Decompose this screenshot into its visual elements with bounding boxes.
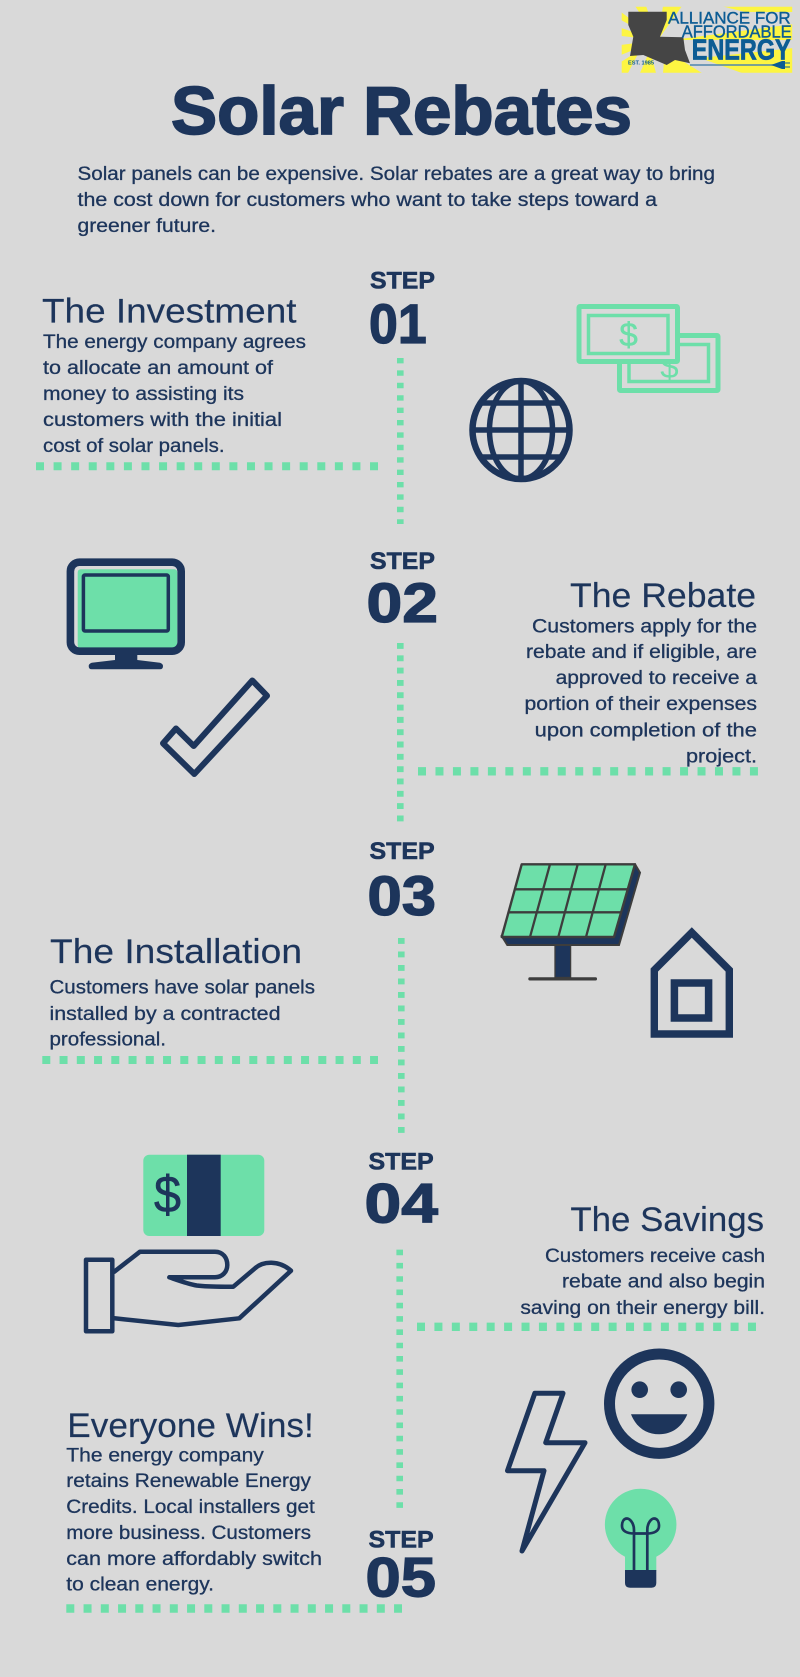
logo: Alliance for Affordable Energy: ALLIANCE FOR: [668, 8, 791, 27]
intro text: [78, 164, 715, 237]
icon: open hand: [86, 1252, 291, 1331]
step 2 body text: Customers apply for the: [532, 616, 757, 638]
step 2 body text: [524, 616, 757, 768]
step 5 body text: The energy company: [66, 1445, 264, 1466]
step 5 body text: [66, 1445, 322, 1596]
step 3 body text: installed by a contracted: [50, 1004, 280, 1025]
icon: monitor: [70, 562, 181, 669]
step 5 body text: retains Renewable Energy: [66, 1471, 312, 1492]
icon: cash note: [143, 1155, 264, 1236]
step 5 body text: to clean energy.: [66, 1575, 214, 1596]
dotted connector vertical: [397, 358, 404, 524]
panel: step 5 everyone wins: [66, 1354, 709, 1609]
logo: Alliance for Affordable Energy: EST. 1985: [628, 60, 654, 66]
step 2 label: STEP: [370, 548, 435, 575]
logo: Alliance for Affordable Energy: [621, 6, 794, 73]
step 4 body text: rebate and also begin: [562, 1272, 765, 1293]
dotted connector horizontal: [418, 767, 758, 775]
step 1 body text: [43, 332, 306, 457]
panel: step 4 the savings: [86, 1149, 765, 1508]
icon: light bulb: [605, 1489, 676, 1588]
step 1 body text: money to assisting its: [43, 384, 244, 405]
step 1 number: 01: [369, 292, 427, 355]
icon: money bills: $: [660, 348, 679, 385]
step 2 body text: approved to receive a: [556, 668, 757, 689]
step 5 body text: Credits. Local installers get: [66, 1497, 316, 1518]
intro text: Solar panels can be expensive. Solar rebates are a great way to bring: [78, 164, 715, 185]
icon: lightning bolt: [508, 1393, 585, 1551]
dotted connector vertical: [398, 938, 405, 1133]
step 3 body text: professional.: [50, 1030, 166, 1051]
dotted connector vertical: [396, 1250, 403, 1508]
step 3 heading: The Installation: [50, 933, 302, 971]
intro text: greener future.: [78, 216, 216, 237]
step 1 label: STEP: [370, 268, 435, 294]
dotted connector horizontal: [42, 1056, 378, 1064]
step 4 body text: [520, 1246, 765, 1319]
step 5 body text: can more affordably switch: [66, 1549, 322, 1570]
step 1 body text: customers with the initial: [43, 410, 282, 431]
step 1 body text: cost of solar panels.: [43, 436, 224, 457]
step 5 number: 05: [366, 1546, 436, 1609]
icon: money bills: [579, 306, 718, 390]
icon: smiley face: [610, 1354, 709, 1453]
step 2 body text: project.: [686, 746, 757, 768]
icon: globe: [472, 381, 570, 479]
panel: step 2 the rebate: [70, 548, 758, 821]
icon: solar panel: [502, 864, 640, 980]
step 5 body text: more business. Customers: [66, 1523, 311, 1544]
step 4 number: 04: [364, 1171, 438, 1234]
step 5 label: STEP: [368, 1527, 434, 1554]
dotted connector vertical: [397, 643, 404, 821]
intro text: the cost down for customers who want to take steps toward a: [78, 190, 657, 211]
icon: cash note: $: [154, 1166, 181, 1224]
dotted connector horizontal: [66, 1604, 402, 1613]
step 2 body text: upon completion of the: [535, 720, 757, 741]
step 3 number: 03: [368, 864, 436, 927]
step 2 heading: The Rebate: [570, 577, 756, 615]
icon: money bills: $: [619, 316, 638, 353]
step 4 label: STEP: [368, 1149, 434, 1176]
panel: step 3 the installation: [42, 838, 729, 1133]
step 1 body text: The energy company agrees: [43, 332, 306, 353]
icon: house: [654, 932, 729, 1034]
title: Solar Rebates: [171, 73, 632, 149]
step 4 body text: Customers receive cash: [545, 1246, 765, 1267]
step 1 heading: The Investment: [42, 292, 297, 330]
step 3 body text: Customers have solar panels: [50, 978, 315, 999]
step 2 body text: rebate and if eligible, are: [526, 642, 757, 663]
step 1 body text: to allocate an amount of: [43, 358, 274, 379]
step 3 body text: [50, 978, 315, 1051]
step 4 body text: saving on their energy bill.: [520, 1298, 765, 1319]
step 2 body text: portion of their expenses: [524, 694, 757, 715]
step 3 label: STEP: [370, 838, 435, 865]
panel: step 1 the investment: [36, 268, 718, 524]
dotted connector horizontal: [417, 1323, 756, 1331]
dotted connector horizontal: [36, 462, 378, 470]
icon: check mark: [163, 680, 267, 774]
step 4 heading: The Savings: [570, 1201, 764, 1239]
step 5 heading: Everyone Wins!: [67, 1407, 314, 1445]
logo: Alliance for Affordable Energy: AFFORDABLE: [682, 21, 792, 41]
step 2 number: 02: [366, 571, 438, 634]
